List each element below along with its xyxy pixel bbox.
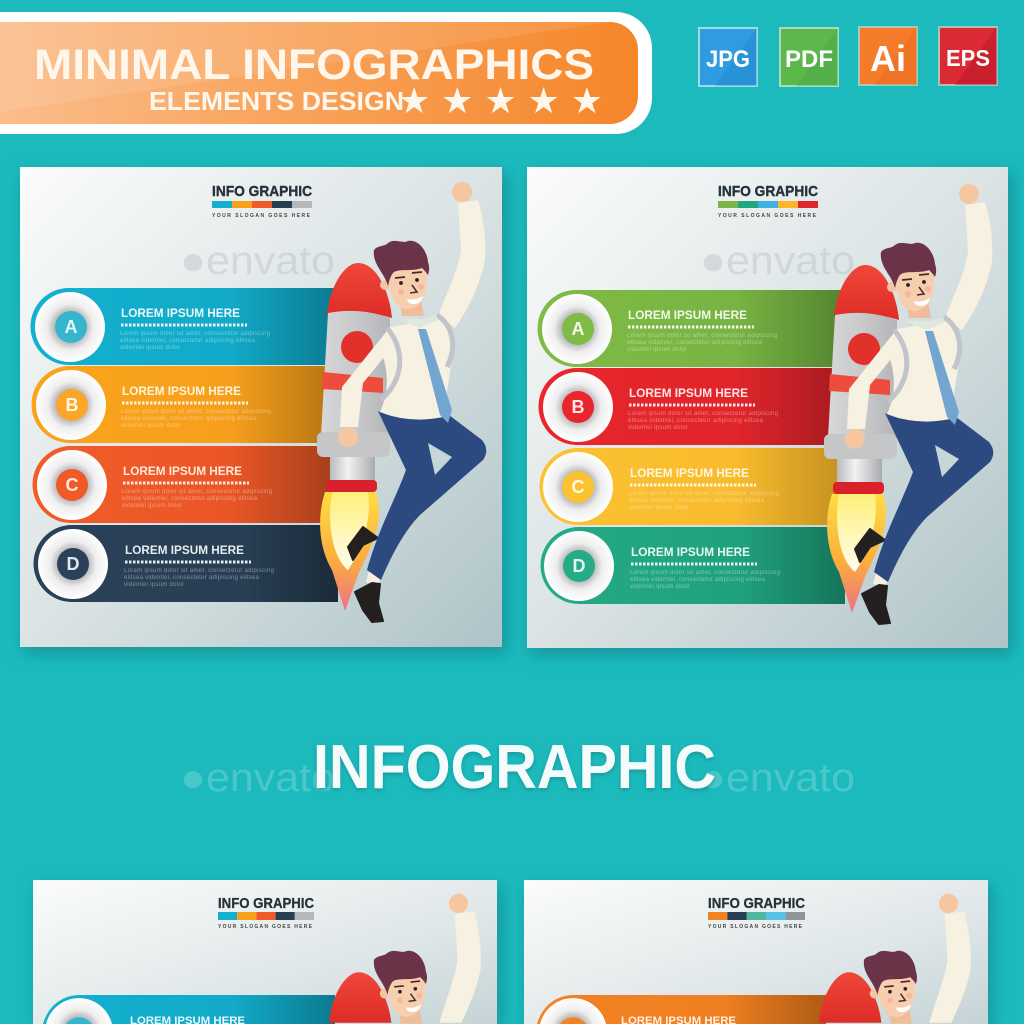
format badge: PDF: PDF: [785, 46, 833, 73]
section heading: INFOGRAPHIC: [313, 733, 716, 802]
watermark: envato left: ●envato: [180, 756, 335, 800]
illustration: businessman with rocket: [824, 184, 993, 624]
row C: [540, 448, 844, 525]
row D: D: [66, 554, 80, 574]
row D: [34, 525, 338, 602]
format badge: EPS: [939, 27, 997, 85]
format badge: JPG: [699, 28, 757, 86]
panel: blue lower infographic card: [33, 880, 497, 1024]
row A: A: [572, 319, 584, 339]
row B: Lorem ipsum dolor sit amet, consectetur adipiscing: [121, 409, 271, 415]
row D: LOREM IPSUM HERE: [125, 545, 244, 557]
row B: Lorem ipsum dolor sit amet, consectetur adipiscing: [628, 411, 778, 417]
watermark: envato right: ●envato: [700, 756, 855, 800]
row C: LOREM IPSUM HERE: [123, 466, 242, 478]
panel: orange lower infographic card: [524, 880, 988, 1024]
row C: elitsea videmlei, consectetur adipiscing elitsea: [629, 498, 765, 504]
row C: videmlei ipsum dolor: [122, 503, 182, 509]
row A: [537, 995, 826, 1024]
row B: B: [66, 395, 78, 415]
logo: YOUR SLOGAN GOES HERE: [708, 924, 803, 930]
row A: Lorem ipsum dolor sit amet, consectetur adipiscing: [627, 333, 777, 339]
row D: elitsea videmlei, consectetur adipiscing elitsea: [124, 575, 260, 581]
title banner: [0, 12, 652, 134]
row B: elitsea videmlei, consectetur adipiscing elitsea: [121, 416, 257, 422]
rating stars: ★★★★★: [398, 80, 603, 121]
row C: Lorem ipsum dolor sit amet, consectetur adipiscing: [122, 489, 272, 495]
row A: videmlei ipsum dolor: [120, 345, 180, 351]
row B: B: [572, 397, 584, 417]
row B: elitsea videmlei, consectetur adipiscing elitsea: [628, 418, 764, 424]
row D: elitsea videmlei, consectetur adipiscing elitsea: [630, 577, 766, 583]
logo: [708, 896, 805, 930]
watermark: ●envato: [700, 239, 855, 283]
panel: green red infographic card: [527, 167, 1008, 648]
row A: elitsea videmlei, consectetur adipiscing elitsea: [120, 338, 256, 344]
logo: YOUR SLOGAN GOES HERE: [212, 213, 311, 219]
row B: [32, 366, 336, 443]
row D: D: [572, 556, 586, 576]
row D: videmlei ipsum dolor: [124, 582, 184, 588]
row A: LOREM IPSUM HERE: [628, 310, 747, 322]
watermark: ●envato: [180, 239, 335, 283]
row C: elitsea videmlei, consectetur adipiscing elitsea: [122, 496, 258, 502]
row D: LOREM IPSUM HERE: [631, 547, 750, 559]
row A: A: [64, 317, 78, 337]
logo: INFO GRAPHIC: [212, 183, 312, 200]
format badge: JPG: JPG: [706, 46, 750, 73]
row A: [31, 288, 338, 365]
illustration: businessman with rocket: [819, 894, 971, 1024]
logo: INFO GRAPHIC: [718, 183, 818, 200]
format badge: Ai: [859, 27, 917, 85]
banner heading: MINIMAL INFOGRAPHICS: [34, 41, 594, 89]
row B: LOREM IPSUM HERE: [122, 386, 241, 398]
logo: INFO GRAPHIC: [218, 896, 314, 912]
row A: Lorem ipsum dolor sit amet, consectetur adipiscing: [120, 331, 270, 337]
logo: INFO GRAPHIC: [708, 896, 805, 912]
illustration: businessman with rocket: [329, 894, 481, 1024]
row D: Lorem ipsum dolor sit amet, consectetur adipiscing: [124, 568, 274, 574]
banner subtitle: ELEMENTS DESIGN: [149, 86, 404, 116]
row B: videmlei ipsum dolor: [628, 425, 688, 431]
row C: videmlei ipsum dolor: [629, 505, 689, 511]
row C: [32, 446, 337, 523]
panel: blue orange infographic card: [20, 167, 502, 647]
format badge: Ai: Ai: [870, 38, 906, 79]
row A: [43, 995, 335, 1024]
row B: [538, 368, 843, 445]
logo: YOUR SLOGAN GOES HERE: [718, 213, 817, 219]
format badge: EPS: EPS: [946, 45, 990, 71]
row B: LOREM IPSUM HERE: [629, 388, 748, 400]
row A: elitsea videmlei, consectetur adipiscing elitsea: [627, 340, 763, 346]
row A: videmlei ipsum dolor: [627, 347, 687, 353]
row A: LOREM IPSUM HERE: [121, 308, 240, 320]
row D: [540, 527, 845, 604]
format badge: PDF: [780, 28, 838, 86]
logo: [218, 896, 314, 930]
row D: Lorem ipsum dolor sit amet, consectetur adipiscing: [630, 570, 780, 576]
logo: [212, 183, 312, 219]
row A: [538, 290, 842, 367]
row C: C: [66, 475, 78, 495]
row C: LOREM IPSUM HERE: [630, 468, 749, 480]
logo: [718, 183, 818, 219]
row C: C: [572, 477, 584, 497]
row C: Lorem ipsum dolor sit amet, consectetur adipiscing: [629, 491, 779, 497]
row D: videmlei ipsum dolor: [630, 584, 690, 590]
illustration: businessman with rocket: [317, 182, 486, 622]
row B: videmlei ipsum dolor: [121, 423, 181, 429]
logo: YOUR SLOGAN GOES HERE: [218, 924, 313, 930]
